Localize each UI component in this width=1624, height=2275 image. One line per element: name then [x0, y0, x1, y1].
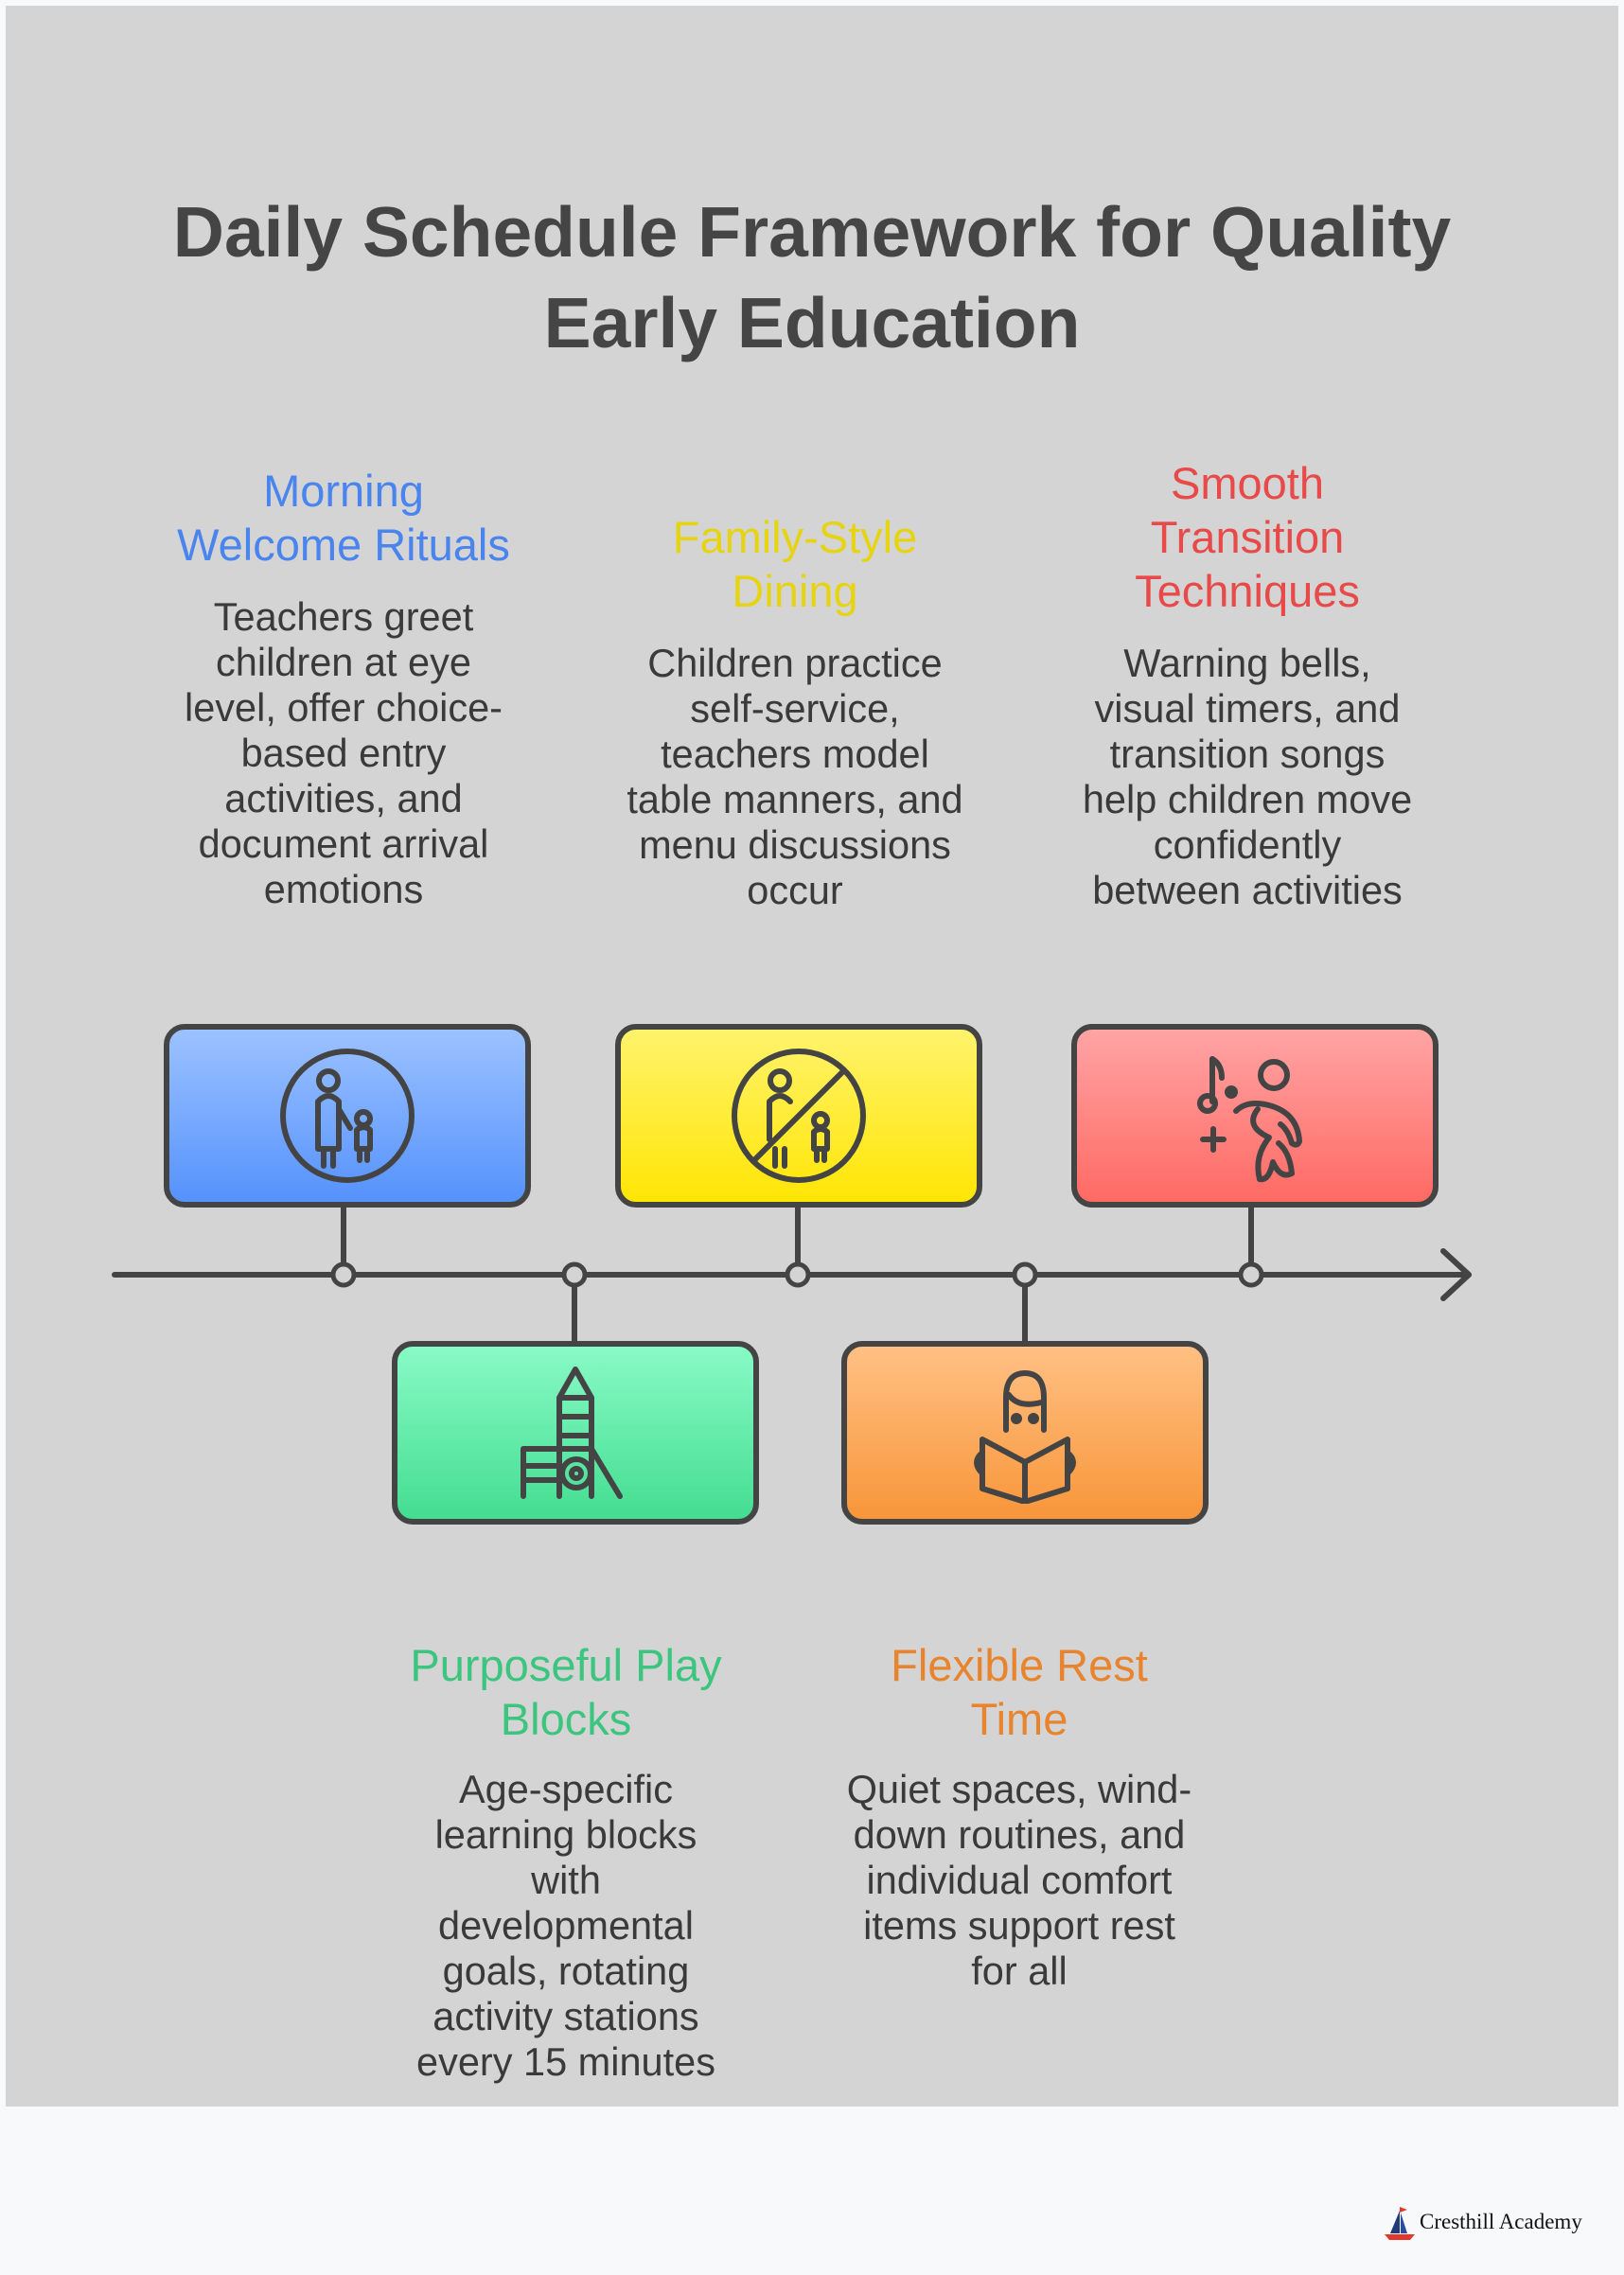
- text: flexible rest time: Time: [971, 1694, 1068, 1744]
- text: morning welcome rituals: level, offer choice-: [185, 685, 503, 730]
- text: family-style dining: menu discussions: [639, 822, 951, 867]
- text: flexible rest time: Flexible Rest: [891, 1640, 1148, 1690]
- text: smooth transition techniques: Smooth: [1171, 458, 1324, 508]
- text: morning welcome rituals: Morning: [263, 466, 424, 516]
- footer logo: [1385, 2207, 1582, 2240]
- text: morning welcome rituals: Teachers greet: [214, 594, 473, 639]
- text: smooth transition techniques: Transition: [1151, 512, 1344, 562]
- icon: music note and dancing child: [1197, 1056, 1302, 1183]
- box: rest (orange): [841, 1341, 1209, 1525]
- icon: child reading book: [974, 1370, 1076, 1504]
- text: purposeful play blocks: every 15 minutes: [416, 2039, 715, 2084]
- text: smooth transition techniques: between activities: [1092, 868, 1403, 912]
- text: morning welcome rituals: children at eye: [216, 640, 471, 684]
- text: morning welcome rituals: activities, and: [224, 776, 463, 820]
- text: morning welcome rituals: based entry: [241, 731, 446, 775]
- text: flexible rest time: items support rest: [863, 1903, 1175, 1948]
- text: smooth transition techniques: visual timers, and: [1095, 686, 1400, 731]
- title: Early Education: [544, 283, 1080, 362]
- text: family-style dining: self-service,: [690, 686, 900, 731]
- text: flexible rest time: [847, 1640, 1192, 1993]
- text: smooth transition techniques: Techniques: [1135, 566, 1360, 616]
- text: purposeful play blocks: Age-specific: [459, 1767, 673, 1811]
- box: dining (yellow): [615, 1024, 982, 1208]
- title: Daily Schedule Framework for Quality: [173, 192, 1451, 272]
- text: morning welcome rituals: Welcome Rituals: [177, 520, 510, 570]
- text: family-style dining: [627, 512, 963, 912]
- text: purposeful play blocks: activity stations: [432, 1994, 699, 2038]
- box: morning (blue): [164, 1024, 531, 1208]
- text: morning welcome rituals: document arrival: [199, 821, 488, 866]
- icon: sailboat: [1385, 2207, 1415, 2240]
- text: flexible rest time: down routines, and: [854, 1812, 1185, 1857]
- text: family-style dining: Dining: [732, 566, 858, 616]
- text: purposeful play blocks: [410, 1640, 722, 2084]
- text: smooth transition techniques: help children move: [1083, 777, 1412, 821]
- text: family-style dining: table manners, and: [627, 777, 963, 821]
- box: transitions (red): [1071, 1024, 1439, 1208]
- text: purposeful play blocks: Blocks: [501, 1694, 631, 1744]
- text: morning welcome rituals: [177, 466, 510, 911]
- text: smooth transition techniques: [1083, 458, 1412, 912]
- text: purposeful play blocks: goals, rotating: [443, 1949, 689, 1993]
- text: smooth transition techniques: transition songs: [1110, 732, 1385, 776]
- text: smooth transition techniques: confidently: [1154, 822, 1341, 867]
- text: purposeful play blocks: developmental: [438, 1903, 694, 1948]
- text: family-style dining: teachers model: [661, 732, 929, 776]
- text: family-style dining: occur: [747, 868, 843, 912]
- title: [173, 192, 1451, 362]
- text: family-style dining: Children practice: [647, 641, 943, 685]
- text: flexible rest time: for all: [971, 1949, 1068, 1993]
- icon: playground tower: [521, 1367, 623, 1499]
- icon: adult and child in circle: [280, 1049, 415, 1183]
- text: purposeful play blocks: Purposeful Play: [410, 1640, 722, 1690]
- text: purposeful play blocks: learning blocks: [435, 1812, 697, 1857]
- text: morning welcome rituals: emotions: [264, 867, 423, 911]
- icon: adult and child with slash: [732, 1049, 866, 1183]
- text: purposeful play blocks: with: [531, 1858, 601, 1902]
- text: flexible rest time: Quiet spaces, wind-: [847, 1767, 1192, 1811]
- text: family-style dining: Family-Style: [673, 512, 917, 562]
- box: play (green): [392, 1341, 759, 1525]
- footer logo: Cresthill Academy: [1420, 2210, 1582, 2233]
- text: smooth transition techniques: Warning bells,: [1123, 641, 1371, 685]
- text: flexible rest time: individual comfort: [867, 1858, 1172, 1902]
